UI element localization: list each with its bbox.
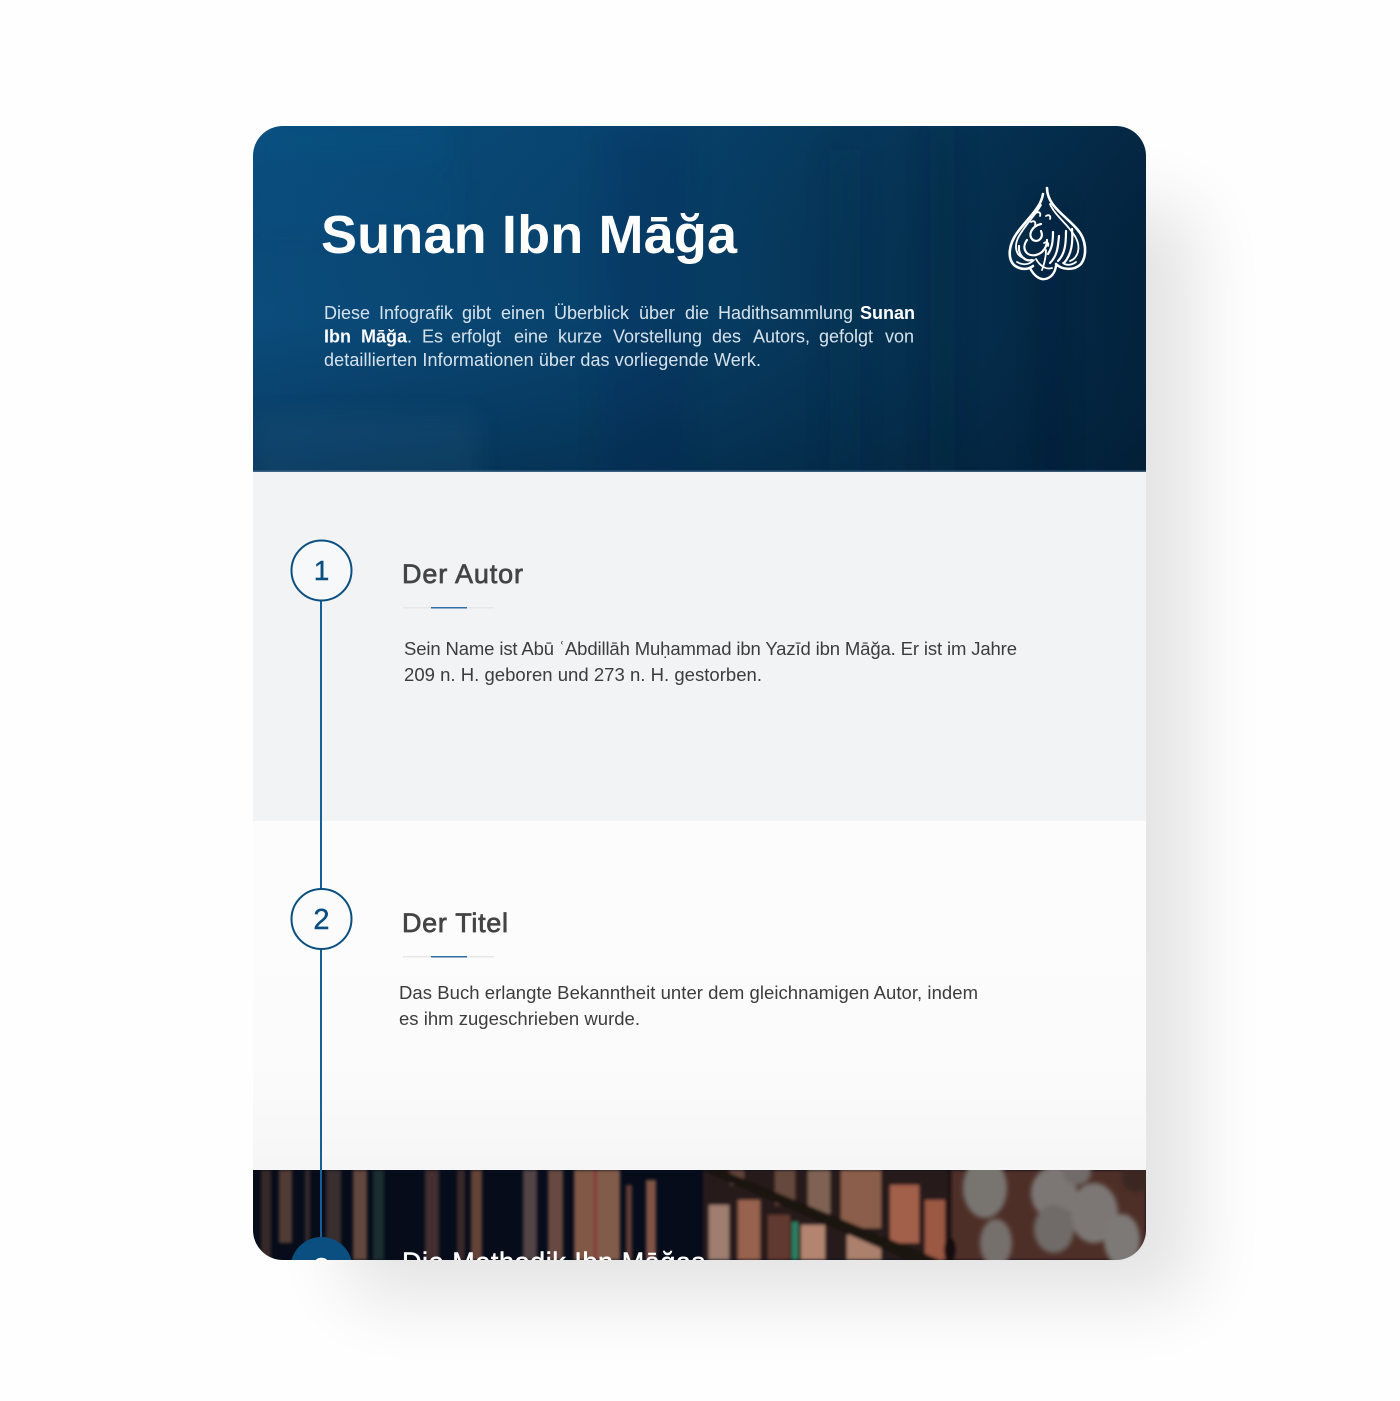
intro text: einen [501, 303, 545, 323]
intro text: Überblick [554, 303, 630, 323]
section 1 heading: Der Autor [402, 559, 523, 589]
panel: header background [253, 116, 1146, 485]
intro text: gefolgt [819, 326, 873, 346]
section 1 text: Sein Name ist Abū ʿAbdillāh Muḥammad ibn Yazīd ibn Māğa. Er ist im Jahre [404, 638, 1017, 659]
infographic card [253, 116, 1150, 1299]
step marker 3 [292, 1237, 352, 1260]
intro text: Infografik [379, 303, 454, 323]
section 2 heading: Der Titel [402, 908, 508, 938]
section 1 text: 209 n. H. geboren und 273 n. H. gestorben. [404, 664, 762, 685]
intro text: kurze [558, 326, 602, 346]
intro text: Ibn [324, 326, 351, 346]
intro text: Es [422, 326, 443, 346]
section 1 divider [403, 607, 494, 608]
card shadow [345, 205, 1195, 1300]
step marker 3: 3 [313, 1253, 330, 1285]
intro text: . [407, 326, 412, 346]
intro text: detaillierten Informationen über das vorliegende Werk. [324, 350, 761, 370]
intro text: Sunan [860, 303, 915, 323]
panel: section 1 background [253, 472, 1146, 821]
intro text: Māğa [361, 326, 408, 346]
intro text: Vorstellung [613, 326, 702, 346]
step marker 2: 2 [313, 904, 330, 936]
section 2 text: Das Buch erlangte Bekanntheit unter dem gleichnamigen Autor, indem [399, 982, 978, 1003]
intro text: über [639, 303, 675, 323]
step marker 1 [292, 540, 352, 600]
section 2 divider [403, 956, 494, 958]
section 2 text: es ihm zugeschrieben wurde. [399, 1008, 640, 1029]
step marker 2 [292, 889, 352, 949]
intro text [324, 303, 915, 370]
intro text: Hadithsammlung [718, 303, 853, 323]
intro text: gibt [462, 303, 491, 323]
section 3 heading: Die Methodik Ibn Māğas [402, 1247, 705, 1277]
intro text: von [885, 326, 914, 346]
intro text: Diese [324, 303, 370, 323]
intro text: des [712, 326, 741, 346]
intro text: erfolgt [451, 326, 501, 346]
panel: section 3 photo background [253, 1170, 1146, 1260]
intro text: eine [514, 326, 548, 346]
step marker 1: 1 [314, 555, 329, 586]
section 2 text [399, 982, 978, 1029]
panel: section 2 background [253, 821, 1146, 1170]
intro text: die [685, 303, 709, 323]
section 1 text [404, 638, 1017, 685]
icon: calligraphic teardrop emblem [1010, 188, 1085, 279]
intro text: Autors, [753, 326, 810, 346]
title: Sunan Ibn Māğa [321, 205, 738, 265]
timeline line [320, 600, 322, 1240]
